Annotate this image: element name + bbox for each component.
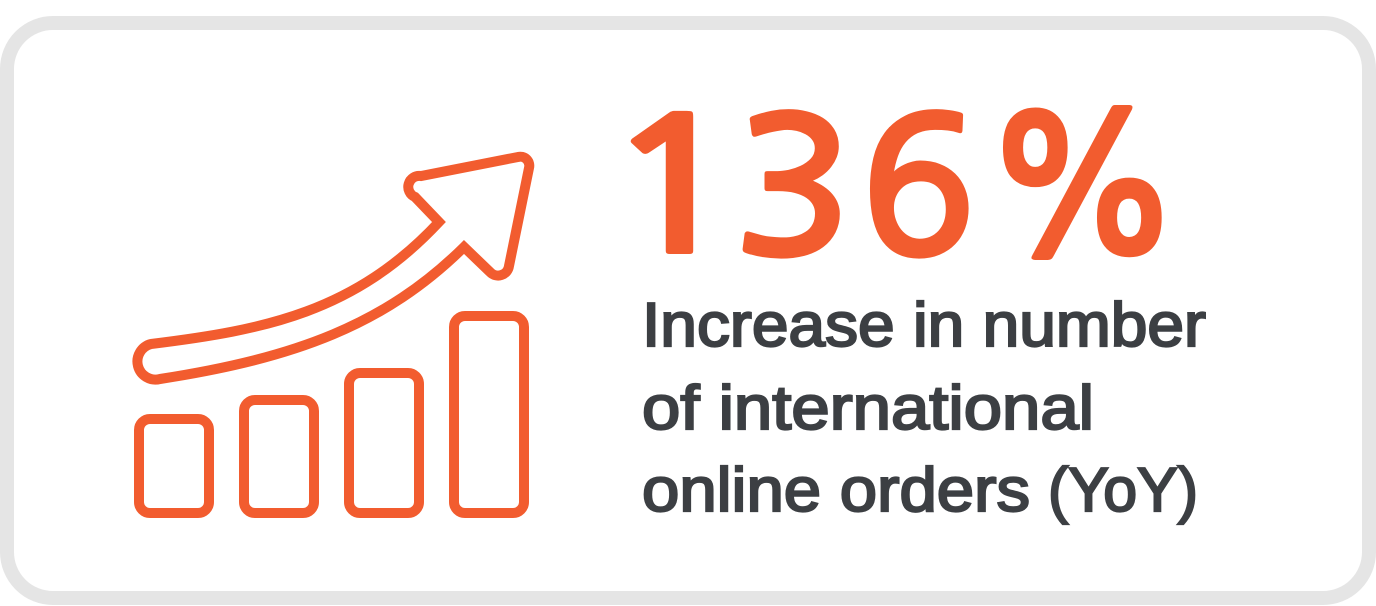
big number: 3 bbox=[731, 96, 856, 285]
icon: bar 1 bbox=[139, 419, 209, 513]
big number bbox=[600, 96, 1182, 285]
icon: bar 3 bbox=[349, 373, 419, 513]
line 3: online orders bbox=[642, 456, 1030, 525]
line 3 suffix: (YoY) bbox=[1048, 456, 1198, 525]
icon: rising arrow over bars bbox=[137, 157, 529, 513]
line 1: Increase in number bbox=[642, 291, 1206, 360]
big number: 6 bbox=[858, 96, 978, 285]
icon: bar 2 bbox=[244, 400, 314, 513]
icon: arrow bbox=[137, 157, 529, 380]
icon: bar 4 bbox=[454, 316, 524, 513]
line 2: of international bbox=[642, 374, 1094, 443]
big number: 1 bbox=[600, 96, 748, 281]
description text bbox=[642, 291, 1206, 525]
big number: % bbox=[983, 96, 1182, 285]
